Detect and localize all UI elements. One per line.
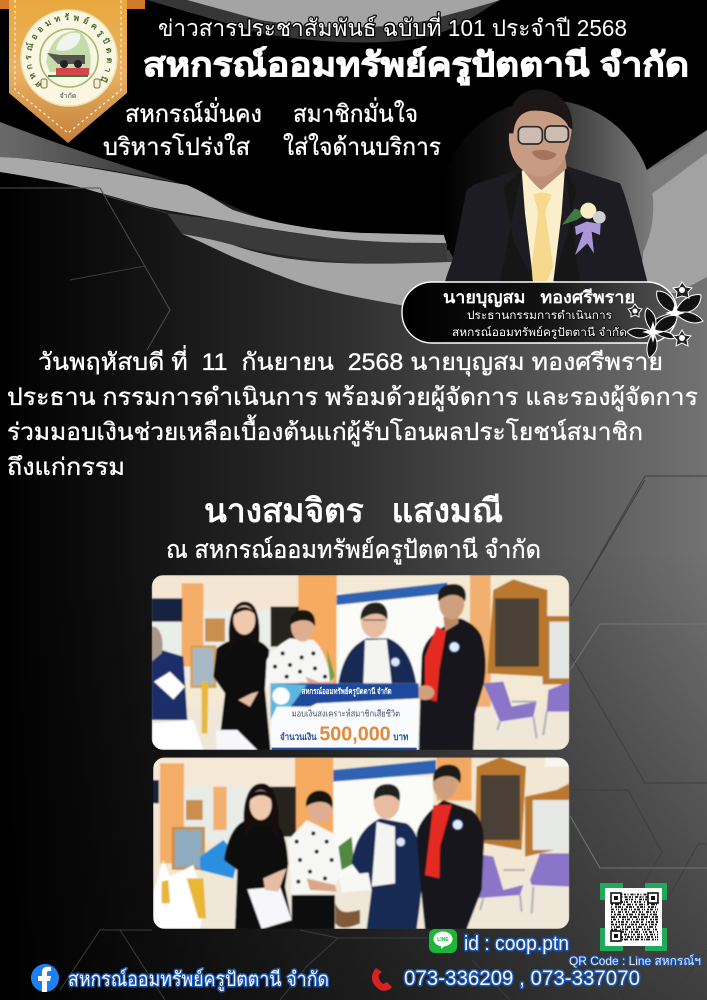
location line: ณ สหกรณ์ออมทรัพย์ครูปัตตานี จำกัด	[166, 536, 541, 565]
ribbon badge logo: จำกัด	[60, 92, 76, 100]
man in navy jacket	[338, 638, 417, 685]
icon: black flowers	[627, 282, 703, 358]
ribbon badge logo	[0, 0, 145, 143]
young man in red polo	[417, 800, 484, 929]
photo 1: cheque handover with sign	[152, 575, 571, 751]
tagline	[103, 97, 441, 161]
name plate	[402, 282, 677, 343]
tagline: บริหารโปร่งใส	[103, 133, 250, 161]
icon: LINE: LINE	[437, 937, 449, 943]
organisation title: สหกรณ์ออมทรัพย์ครูปัตตานี จำกัด	[143, 46, 689, 86]
woman in patterned blouse	[265, 638, 332, 690]
tagline: ใส่ใจด้านบริการ	[283, 133, 441, 161]
young man in red polo	[419, 618, 486, 750]
icon: Facebook	[31, 964, 59, 992]
photo 1: cheque handover with sign: จำนวนเงิน	[280, 732, 317, 742]
body paragraph: ประธาน กรรมการดำเนินการ พร้อมด้วยผู้จัดการ และรองผู้จัดการ	[7, 384, 698, 412]
photo 1: cheque handover with sign: 500,000	[319, 724, 391, 746]
name plate: ประธานกรรมการดำเนินการ	[467, 309, 612, 322]
photo 2: handing envelope	[153, 757, 569, 929]
QR caption: QR Code : Line สหกรณ์ฯ	[569, 954, 701, 968]
QR code	[600, 883, 667, 951]
man in navy jacket	[352, 818, 423, 929]
body paragraph: ถึงแก่กรรม	[7, 454, 125, 481]
body paragraph: ร่วมมอบเงินช่วยเหลือเบื้องต้นแก่ผู้รับโอนผลประโยชน์สมาชิก	[7, 414, 643, 447]
body paragraph: วันพฤหัสบดี ที่ 11 กันยายน 2568 นายบุญสม ทองศรีพราย	[38, 345, 663, 377]
sign	[304, 682, 420, 750]
tagline: สมาชิกมั่นใจ	[293, 97, 418, 128]
icon: phone	[372, 968, 392, 991]
LINE id: id : coop.ptn	[464, 933, 569, 955]
photo 1: cheque handover with sign: สหกรณ์ออมทรัพย์ครูปัตตานี จำกัด	[302, 686, 392, 697]
photo 1: cheque handover with sign: มอบเงินสงเคราะห์สมาชิกเสียชีวิต	[292, 708, 400, 719]
woman in patterned blouse	[288, 820, 342, 895]
woman in black	[213, 638, 271, 750]
name plate: สหกรณ์ออมทรัพย์ครูปัตตานี จำกัด	[452, 325, 627, 339]
photo 1: cheque handover with sign: บาท	[393, 732, 408, 742]
body paragraph	[7, 345, 698, 481]
header issue line: ข่าวสารประชาสัมพันธ์ ฉบับที่ 101 ประจำปี 2568	[158, 12, 627, 41]
phone numbers: 073-336209 , 073-337070	[404, 967, 640, 990]
icon: LINE	[429, 929, 457, 953]
recipient name: นางสมจิตร แสงมณี	[204, 492, 503, 529]
portrait of chairman	[440, 89, 653, 313]
name plate: นายบุญสม ทองศรีพราย	[443, 287, 635, 308]
Facebook page name: สหกรณ์ออมทรัพย์ครูปัตตานี จำกัด	[68, 968, 329, 992]
tagline: สหกรณ์มั่นคง	[125, 97, 262, 128]
woman in black	[224, 820, 293, 929]
ribbon badge logo: สหกรณ์ออมทรัพย์ครูปัตตานี	[26, 12, 112, 88]
